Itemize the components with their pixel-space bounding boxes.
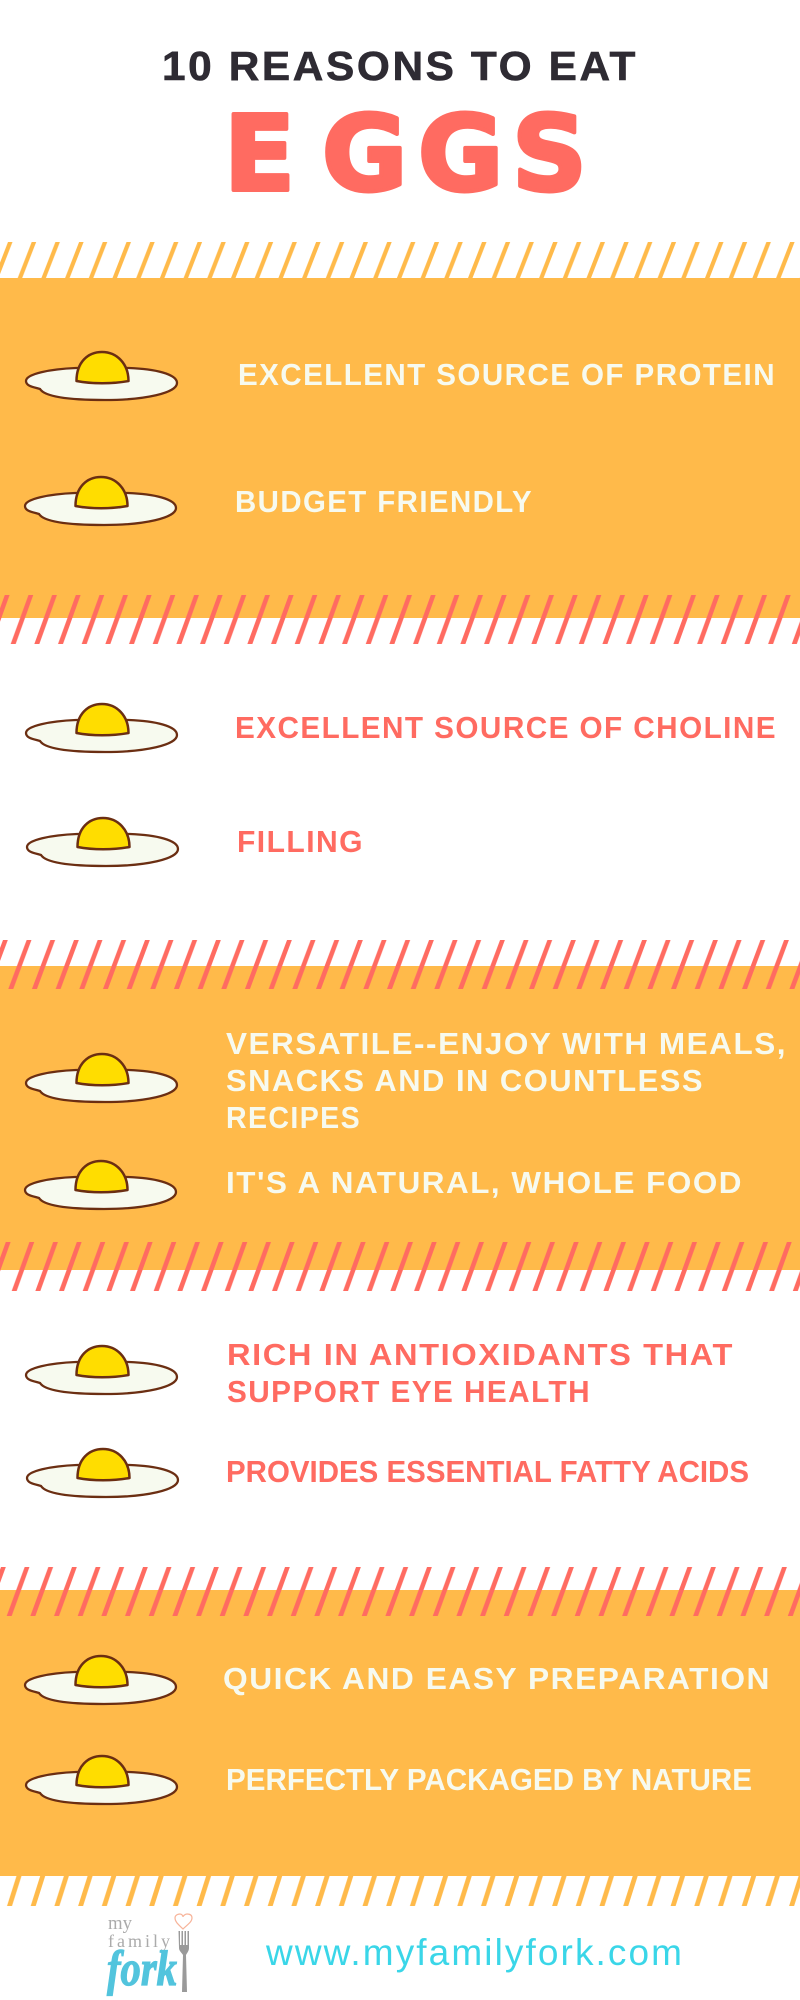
reason 6: IT'S A NATURAL, WHOLE FOOD bbox=[226, 1165, 743, 1200]
website url: www.myfamilyfork.com bbox=[265, 1932, 682, 1973]
reason 7: RICH IN ANTIOXIDANTS THAT bbox=[227, 1337, 734, 1372]
reason 7: SUPPORT EYE HEALTH bbox=[227, 1374, 591, 1409]
icon: egg 6 bbox=[25, 1161, 176, 1209]
reason 5 bbox=[226, 1026, 787, 1135]
logo: my family fork: my bbox=[108, 1913, 132, 1934]
icon: egg 8 bbox=[27, 1449, 178, 1497]
title: eggs: EGGS bbox=[224, 93, 587, 215]
icon: egg 5 bbox=[26, 1054, 177, 1102]
reason 2: BUDGET FRIENDLY bbox=[235, 484, 533, 519]
icon: egg 7 bbox=[26, 1346, 177, 1394]
logo: my family fork: fork bbox=[107, 1940, 177, 1996]
reason 4: FILLING bbox=[237, 824, 364, 859]
icon: egg 3 bbox=[26, 704, 177, 752]
reason 5: RECIPES bbox=[226, 1100, 361, 1135]
reason 8: PROVIDES ESSENTIAL FATTY ACIDS bbox=[226, 1454, 749, 1489]
panel: yellow band 2 bbox=[0, 966, 800, 1270]
reason 9: QUICK AND EASY PREPARATION bbox=[223, 1661, 771, 1696]
reason 10: PERFECTLY PACKAGED BY NATURE bbox=[226, 1762, 752, 1797]
reason 7 bbox=[227, 1337, 734, 1409]
icon: egg 10 bbox=[26, 1756, 177, 1804]
reason 1: EXCELLENT SOURCE OF PROTEIN bbox=[238, 357, 776, 392]
logo: my family fork: family bbox=[108, 1931, 170, 1951]
panel: yellow band 1 bbox=[0, 278, 800, 618]
reason 3: EXCELLENT SOURCE OF CHOLINE bbox=[235, 710, 777, 745]
title: 10 REASONS TO EAT bbox=[162, 43, 638, 89]
panel: yellow band 3 bbox=[0, 1590, 800, 1876]
icon: egg 9 bbox=[25, 1656, 176, 1704]
icon: egg 1 bbox=[26, 352, 177, 400]
logo: my family fork bbox=[107, 1913, 192, 1996]
reason 5: VERSATILE--ENJOY WITH MEALS, bbox=[226, 1026, 787, 1061]
icon: egg 4 bbox=[27, 818, 178, 866]
reason 5: SNACKS AND IN COUNTLESS bbox=[226, 1063, 704, 1098]
icon: egg 2 bbox=[25, 477, 176, 525]
